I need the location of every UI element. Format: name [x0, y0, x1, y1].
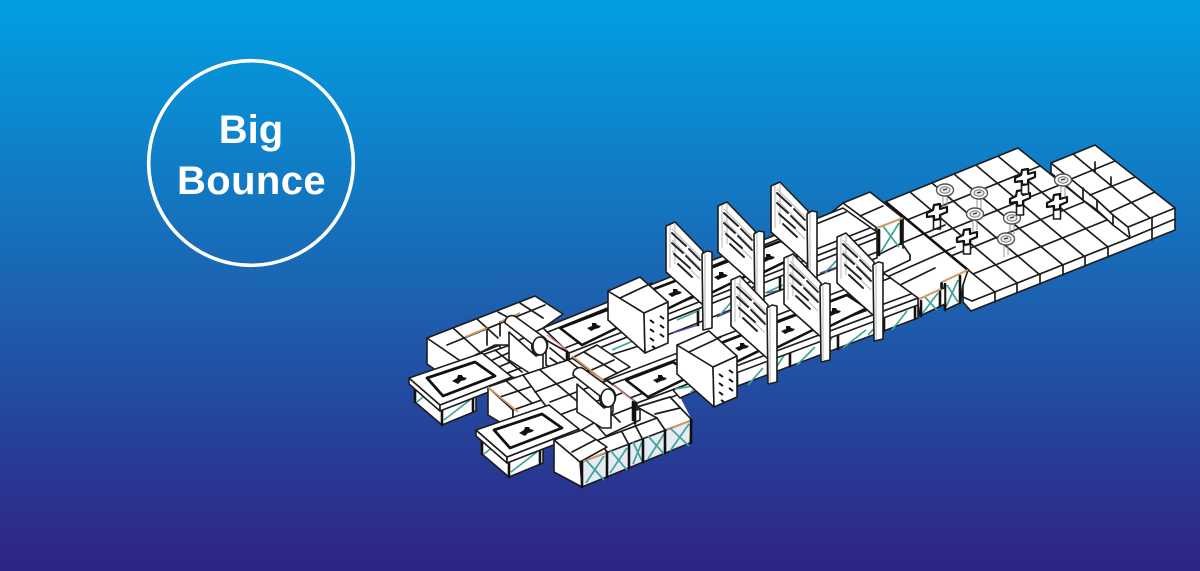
end plateau with pegs [885, 145, 1175, 311]
title badge: Big Bounce: Bounce [177, 159, 326, 203]
perforated block on back lane [608, 277, 668, 353]
isometric obstacle course [409, 145, 1175, 487]
left tile block [427, 296, 563, 385]
lower-left tile block [488, 375, 550, 430]
white fill behind lanes and cluster [488, 225, 890, 487]
perforated block on front lane [677, 331, 737, 407]
hump two [573, 368, 615, 428]
lower channel floor [523, 360, 613, 432]
platform one [409, 353, 512, 425]
fences on front lane [731, 233, 883, 384]
platform two [476, 405, 579, 477]
title badge: Big Bounce [149, 61, 353, 265]
back lane with platforms and truss [543, 208, 877, 368]
hump one [505, 316, 547, 376]
centre tile block [547, 345, 640, 436]
ramp blocks joining lanes to plateau [820, 192, 968, 316]
channel floor with ladder [482, 340, 569, 380]
title badge: Big Bounce: Big [219, 108, 283, 152]
front tile row with trusses [554, 397, 692, 487]
front lane with platforms and truss [607, 274, 918, 423]
fences on back lane [666, 182, 817, 330]
